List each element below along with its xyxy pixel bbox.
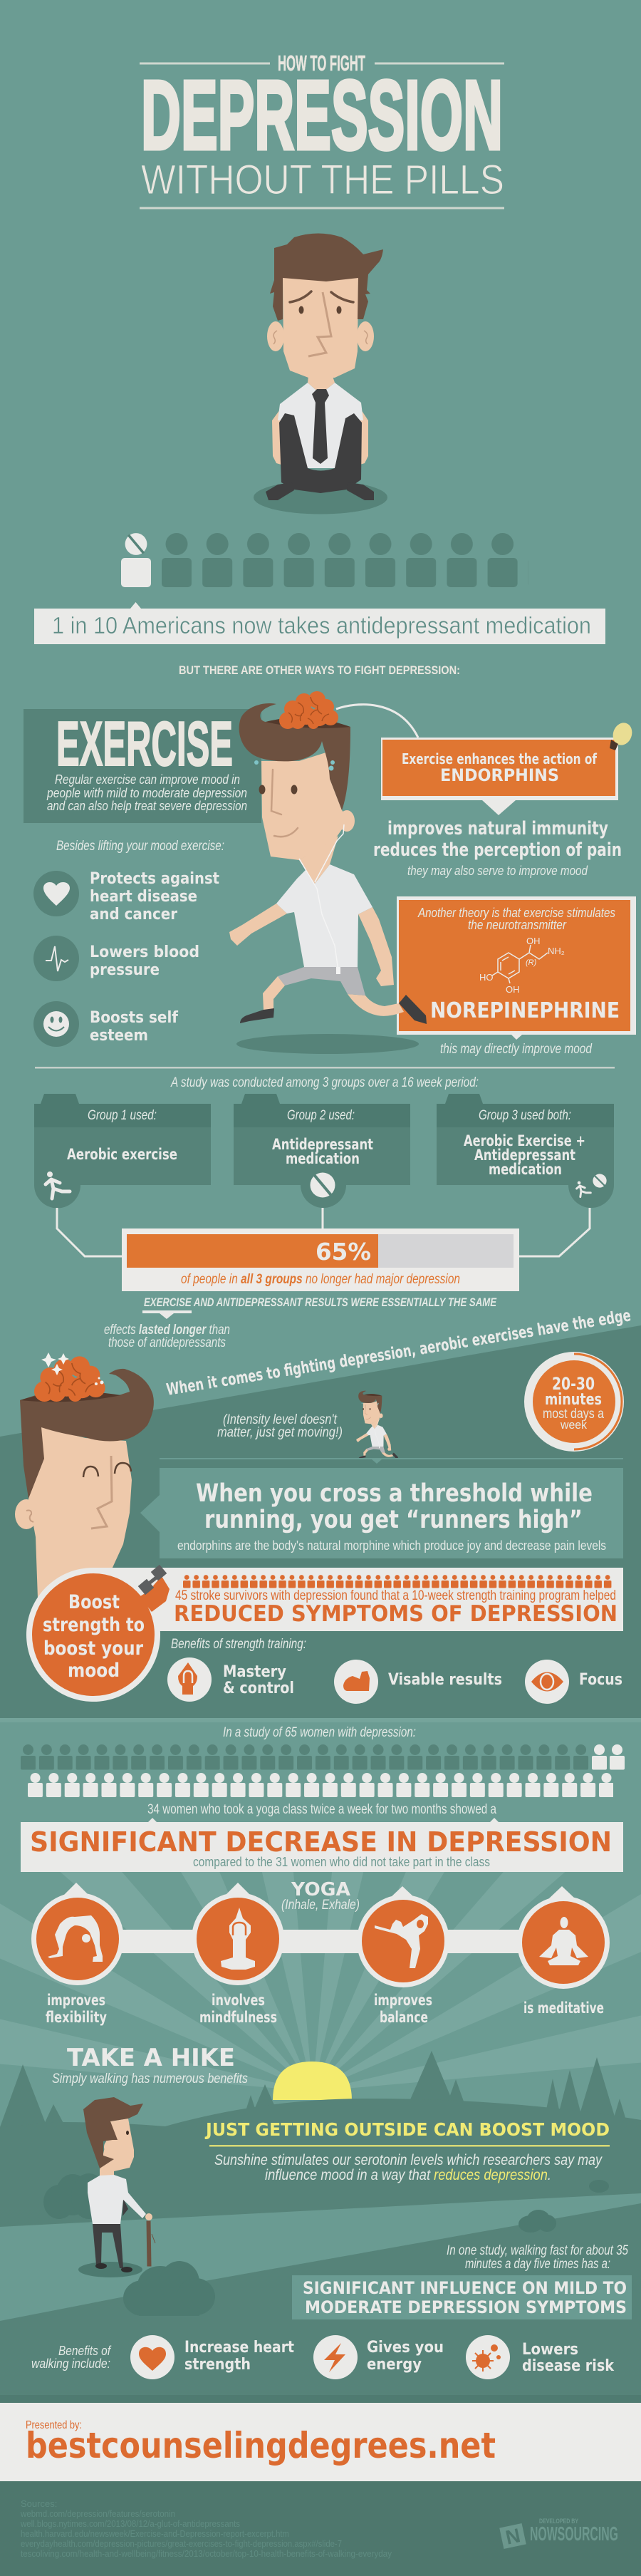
footer: presented by	[0, 2403, 641, 2481]
panel: reduced symptoms banner: REDUCED SYMPTOMS OF DEPRESSION	[174, 1601, 617, 1627]
heading: take a hike: Simply walking has numerous benefits	[52, 2071, 248, 2086]
panel: group 2 folder: Group 2 used:	[287, 1108, 355, 1123]
callout: 1 in 10 Americans	[34, 602, 605, 644]
text: intensity level: matter, just get moving!)	[217, 1425, 343, 1440]
badge: boost strength: Boost	[68, 1591, 120, 1613]
heading: take a hike	[52, 2044, 248, 2086]
benefit: energy: energy	[367, 2356, 422, 2374]
heading: getting outside: JUST GETTING OUTSIDE CAN BOOST MOOD	[204, 2119, 610, 2140]
footer: presented by: Presented by:	[26, 2419, 82, 2431]
panel: significant influence	[292, 2275, 632, 2319]
panel: group 1 folder	[34, 1094, 211, 1208]
man with brain, big head	[15, 1352, 154, 1639]
panel: group 2 folder: medication	[286, 1150, 360, 1167]
panel: group 3 folder: Group 3 used both:	[479, 1108, 571, 1123]
yoga pose: balance	[357, 1886, 449, 2026]
sun rays	[0, 1872, 641, 2088]
footer: sources panel	[0, 2481, 641, 2576]
panel: group 3 folder: Antidepressant	[474, 1147, 575, 1164]
benefit: disease risk: disease risk	[522, 2357, 615, 2375]
callout: effects lasted longer: those of antidepressants	[108, 1335, 226, 1350]
bush: foreground	[123, 2261, 215, 2316]
heading: yoga: YOGA	[291, 1879, 350, 1900]
benefit: energy: Gives you	[367, 2339, 444, 2357]
benefit: heart strength: strength	[184, 2356, 251, 2374]
footer: sources panel: tescoliving.com/health-and-wellbeing/fitness/2013/october/top-10-health-benefits-of-walking-everyday	[21, 2548, 392, 2559]
badge: 20-30 minutes: most days a	[543, 1407, 604, 1422]
badge: 20-30 minutes: 20-30	[552, 1374, 595, 1394]
1 in 10 people pictogram	[121, 533, 528, 588]
badge: 20-30 minutes: week	[560, 1418, 587, 1432]
benefit: heart: Protects against	[90, 870, 219, 888]
panel: 65 percent result	[122, 1228, 519, 1291]
title block: WITHOUT THE PILLS	[141, 157, 504, 203]
benefit: visable results: Visable results	[388, 1671, 502, 1689]
molecule diagram	[479, 936, 565, 995]
panel: group 3 folder	[437, 1094, 614, 1208]
panel: norepinephrine: the neurotransmitter	[468, 918, 567, 932]
callout: effects lasted longer	[104, 1310, 230, 1350]
sparkles	[41, 1352, 104, 1385]
panel: exercise intro: and can also help treat severe depression	[47, 799, 247, 813]
text: besides lifting mood: Besides lifting your mood exercise:	[56, 839, 224, 854]
text: intensity level: (Intensity level doesn't	[223, 1412, 338, 1427]
benefit: self esteem: esteem	[90, 1027, 148, 1045]
benefit: mastery and control: Mastery	[223, 1663, 286, 1681]
panel: group 3 folder: Aerobic Exercise +	[464, 1132, 585, 1149]
logo: nowsourcing: DEVELOPED BY	[539, 2518, 578, 2525]
badge: 20-30 minutes	[524, 1352, 624, 1452]
logo: nowsourcing	[499, 2518, 618, 2549]
pictogram: 65 women	[21, 1744, 625, 1798]
molecule diagram: HO	[479, 972, 493, 983]
molecule diagram: NH₂	[548, 946, 565, 956]
yoga pose: flexibility	[31, 1883, 124, 2026]
text: benefits of walking: walking include:	[31, 2357, 110, 2371]
text: benefits of strength training: Benefits of strength training:	[171, 1637, 306, 1652]
yoga pose: meditative	[517, 1886, 610, 2017]
benefit: blood pressure	[33, 936, 199, 981]
molecule diagram: (R)	[526, 958, 537, 967]
yoga pose: balance: balance	[380, 2009, 428, 2026]
bushes	[43, 2173, 609, 2233]
footer: sources panel: webmd.com/depression/features/serotonin	[20, 2508, 175, 2519]
panel: exercise intro: people with mild to moderate depression	[46, 786, 247, 800]
hiker man	[78, 2097, 155, 2277]
yoga pose: mindfulness	[192, 1883, 284, 2026]
heading: yoga: (Inhale, Exhale)	[281, 1898, 360, 1913]
title block: HOW TO FIGHT	[278, 51, 365, 76]
sad man sitting	[254, 234, 387, 514]
panel: exercise intro: EXERCISE	[56, 708, 233, 779]
icon: pill	[311, 1173, 335, 1197]
icon: light bulb	[610, 720, 635, 750]
hiking trail	[0, 2193, 641, 2321]
icon: runner and pill	[577, 1174, 607, 1197]
molecule diagram: OH	[526, 936, 540, 946]
panel: 65 percent result: 65%	[316, 1238, 371, 1266]
yoga pose: mindfulness: mindfulness	[199, 2009, 277, 2026]
badge: boost strength: mood	[68, 1660, 120, 1682]
benefit: heart: and cancer	[90, 906, 177, 924]
panel: dark diagonal background	[0, 1325, 641, 1718]
panel: significant decrease banner: compared to the 31 women who did not take part in the class	[193, 1855, 490, 1869]
text: sunshine: influence mood in a way that reduces depression.	[265, 2167, 551, 2183]
text: directly improve mood: this may directly improve mood	[440, 1042, 593, 1057]
pictogram: 45 stroke survivors	[183, 1575, 613, 1588]
text: study of 65 women: In a study of 65 women with depression:	[223, 1725, 416, 1740]
text: one study walking	[447, 2243, 628, 2272]
badge: boost strength: strength to	[43, 1614, 145, 1636]
panel: 65 percent result: of people in all 3 groups no longer had major depression	[181, 1272, 460, 1287]
heading: take a hike: TAKE A HIKE	[67, 2044, 235, 2072]
divider with pointer	[160, 1458, 623, 1464]
panel: group 2 folder	[234, 1094, 410, 1208]
text: results same: EXERCISE AND ANTIDEPRESSANT RESULTS WERE ESSENTIALLY THE SAME	[144, 1295, 497, 1309]
benefit: focus	[525, 1660, 622, 1704]
panel: exercise intro: Regular exercise can improve mood in	[55, 772, 240, 787]
benefit: blood pressure: pressure	[90, 961, 160, 979]
benefit: energy	[313, 2335, 444, 2379]
benefit: heart strength	[130, 2335, 294, 2379]
text: study intro: A study was conducted among 3 groups over a 16 week period:	[170, 1075, 479, 1090]
benefit: blood pressure: Lowers blood	[90, 943, 199, 961]
badge: 20-30 minutes: minutes	[545, 1391, 602, 1409]
yoga pose: flexibility: improves	[47, 1992, 105, 2009]
landscape: trees and hills	[0, 2051, 641, 2403]
title block	[140, 51, 504, 210]
yoga pose: flexibility: flexibility	[46, 2009, 107, 2026]
text: benefits of walking	[31, 2344, 112, 2371]
panel: reduced symptoms banner	[93, 1568, 623, 1631]
connector lines	[57, 1208, 590, 1256]
panel: group 3 folder: medication	[489, 1161, 562, 1178]
panel: norepinephrine: NOREPINEPHRINE	[430, 998, 620, 1023]
benefit: mastery and control	[167, 1657, 294, 1702]
benefit: focus: Focus	[579, 1671, 622, 1689]
yoga pose: balance: improves	[374, 1992, 432, 2009]
text: sunshine	[214, 2152, 603, 2183]
yoga pose: mindfulness: involves	[212, 1992, 265, 2009]
badge: boost strength	[26, 1568, 160, 1702]
text: benefits of walking: Benefits of	[58, 2344, 112, 2358]
heading: yoga	[281, 1879, 360, 1913]
footer: sources panel: well.blogs.nytimes.com/2013/08/12/a-glut-of-antidepressants	[20, 2518, 240, 2529]
text: intensity level	[217, 1412, 343, 1440]
panel: significant decrease banner: SIGNIFICANT DECREASE IN DEPRESSION	[30, 1826, 612, 1858]
benefit: self esteem: Boosts self	[90, 1009, 178, 1027]
benefit: visable results	[334, 1660, 502, 1704]
text: endorphin effects	[373, 818, 622, 878]
benefit: mastery and control: & control	[223, 1680, 294, 1697]
badge: boost strength: boost your	[43, 1638, 144, 1660]
callout: effects lasted longer: effects lasted longer than	[104, 1323, 230, 1338]
benefit: disease risk: Lowers	[522, 2341, 578, 2359]
yoga pose: meditative: is meditative	[523, 2000, 604, 2017]
footer: presented by: bestcounselingdegrees.net	[26, 2425, 496, 2466]
sun	[273, 2062, 352, 2100]
panel: group 1 folder: Aerobic exercise	[67, 1146, 177, 1163]
panel: runners high	[140, 1468, 623, 1558]
text: 34 women yoga: 34 women who took a yoga class twice a week for two months showed a	[147, 1802, 496, 1817]
footer: sources panel: Sources:	[21, 2498, 57, 2509]
running man with brain	[229, 691, 427, 1054]
icon: runner	[46, 1171, 70, 1199]
footer: sources panel: everydayhealth.com/depression-pictures/great-exercises-to-fight-depression.aspx#/slide-7	[21, 2538, 342, 2549]
benefit: heart: heart disease	[90, 888, 197, 906]
logo: nowsourcing: N	[504, 2524, 522, 2549]
footer: sources panel: health.harvard.edu/newsweek/Exercise-and-Depression-report-excerpt.htm	[21, 2528, 289, 2539]
panel: exercise intro	[24, 708, 261, 823]
text: endorphin effects: they may also serve to improve mood	[407, 864, 588, 878]
panel: group 2 folder: Antidepressant	[272, 1136, 373, 1153]
yoga connector bar	[118, 1930, 519, 1953]
callout: 1 in 10 Americans: 1 in 10 Americans now takes antidepressant medication	[52, 612, 591, 638]
mini runner	[356, 1391, 398, 1459]
benefit: heart strength: Increase heart	[184, 2339, 294, 2357]
panel: group 1 folder: Group 1 used:	[88, 1108, 157, 1123]
panel: endorphins: ENDORPHINS	[440, 765, 559, 785]
subheading: BUT THERE ARE OTHER WAYS TO FIGHT DEPRESSION:	[179, 663, 460, 677]
panel: endorphins	[336, 705, 618, 815]
benefit: heart	[33, 870, 219, 924]
icon: flexed arm with dumbbell	[138, 1565, 170, 1612]
panel: significant decrease banner	[21, 1818, 623, 1872]
molecule diagram: OH	[506, 984, 520, 995]
benefit: self esteem	[33, 1001, 178, 1047]
benefit: disease risk	[466, 2335, 615, 2379]
panel: norepinephrine	[397, 896, 636, 1040]
